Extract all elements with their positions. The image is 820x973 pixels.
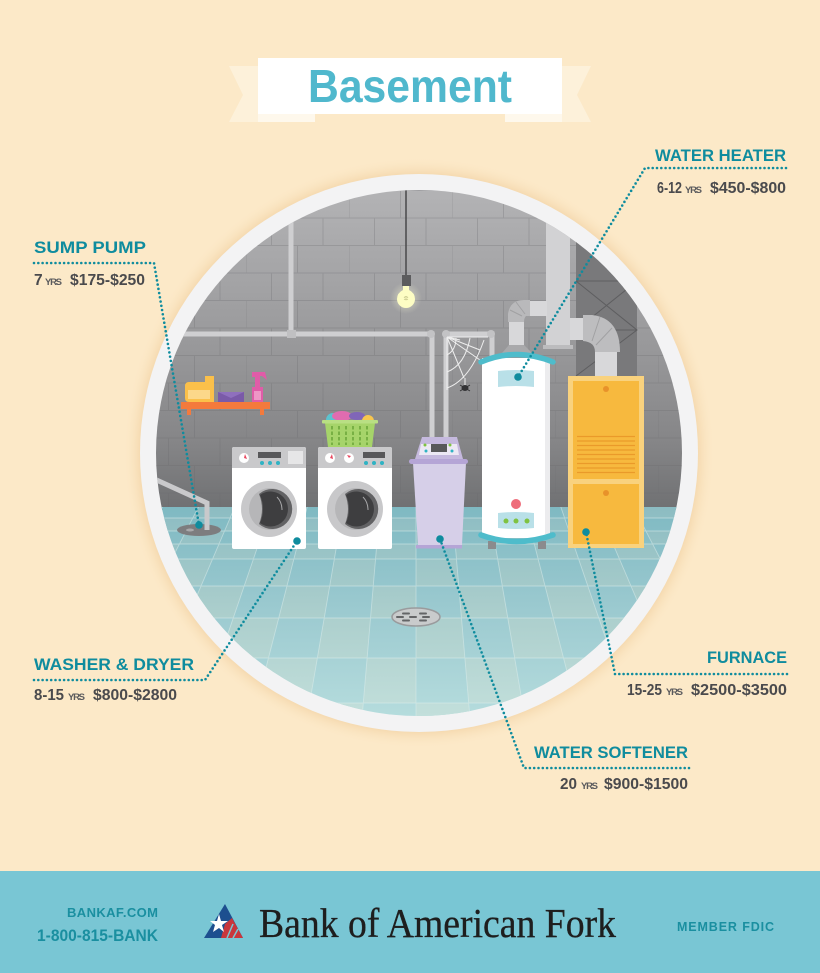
- sump pump leader and label: YRS: [45, 277, 62, 288]
- wall pipes: [184, 222, 495, 437]
- sump pump: [157, 478, 221, 536]
- washer and dryer leader and label: YRS: [68, 692, 85, 703]
- water heater leader and label: WATER HEATER: [655, 146, 786, 165]
- title banner: [229, 58, 591, 122]
- water heater leader and label: 6-12: [657, 180, 682, 197]
- sump pump leader and label: $175-$250: [70, 272, 145, 289]
- furnace leader and label: [582, 528, 787, 699]
- furnace: [568, 376, 644, 548]
- water heater leader and label: $450-$800: [710, 180, 786, 197]
- brick wall: [150, 185, 690, 510]
- title: Basement: [308, 60, 512, 112]
- footer band: [0, 871, 820, 973]
- sump pump leader and label: 7: [34, 272, 43, 289]
- hanging light bulb: [392, 190, 420, 312]
- water softener leader and label: $900-$1500: [604, 776, 688, 793]
- water softener leader and label: 20: [560, 776, 577, 793]
- duct grid: [576, 242, 638, 376]
- circular basement scene: [133, 167, 704, 738]
- furnace leader and label: 15-25: [627, 682, 662, 699]
- washer and dryer leader and label: WASHER & DRYER: [34, 655, 194, 674]
- water softener leader and label: WATER SOFTENER: [534, 743, 688, 762]
- dryer: [318, 447, 392, 549]
- water softener leader and label: YRS: [581, 781, 598, 792]
- water softener leader and label: [436, 535, 689, 793]
- footer contact: 1-800-815-BANK: [37, 926, 159, 945]
- water heater leader and label: [514, 146, 786, 381]
- footer contact: [37, 905, 159, 945]
- washer and dryer leader and label: 8-15: [34, 687, 64, 704]
- water heater leader and label: YRS: [685, 185, 702, 196]
- washer and dryer leader and label: $800-$2800: [93, 687, 177, 704]
- washer: [232, 447, 306, 549]
- floor drain: [392, 608, 440, 626]
- bank logo: Bank of American Fork: [259, 900, 616, 946]
- member FDIC: MEMBER FDIC: [677, 920, 774, 934]
- vent ducts: [502, 223, 620, 376]
- furnace leader and label: $2500-$3500: [691, 682, 787, 699]
- footer contact: BANKAF.COM: [67, 905, 158, 920]
- water heater: [481, 354, 553, 549]
- cobweb and spider: [447, 337, 488, 391]
- sump pump leader and label: SUMP PUMP: [34, 238, 146, 257]
- laundry basket: [322, 411, 378, 447]
- furnace leader and label: YRS: [666, 687, 683, 698]
- tiled floor: [162, 507, 676, 716]
- washer and dryer leader and label: [34, 537, 301, 704]
- furnace leader and label: FURNACE: [707, 648, 787, 667]
- water softener: [409, 437, 468, 548]
- shelf with supplies: [181, 372, 270, 415]
- sump pump leader and label: [34, 238, 203, 529]
